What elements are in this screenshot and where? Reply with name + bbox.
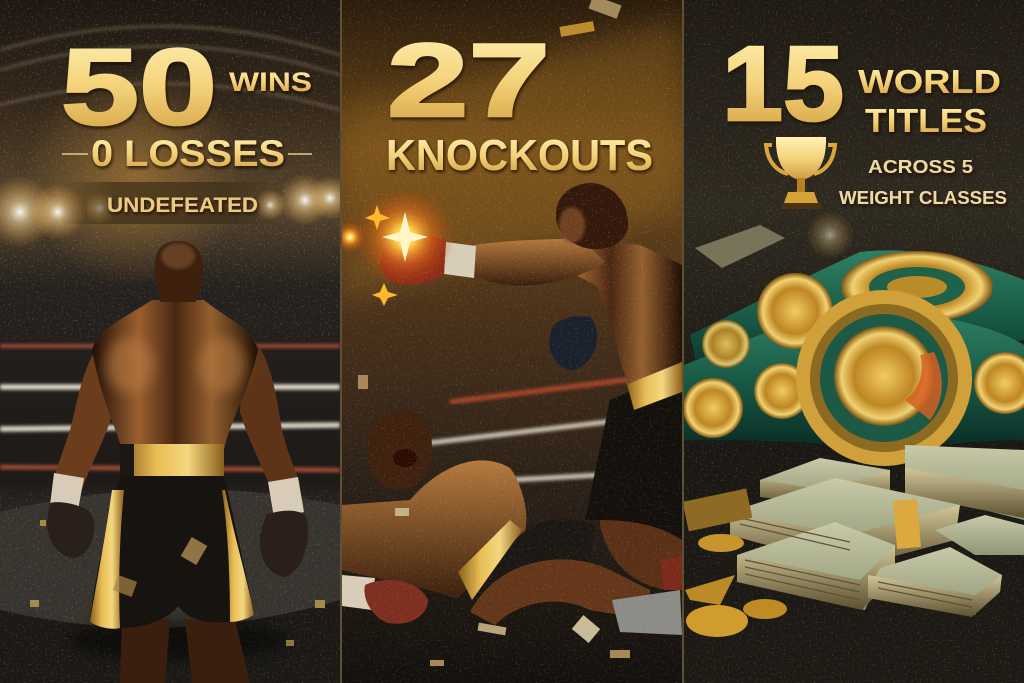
head	[155, 241, 203, 302]
shorts	[90, 475, 254, 628]
panel dividers	[340, 0, 684, 683]
label titles: TITLES	[865, 102, 987, 139]
stat: 27 knockouts	[388, 42, 654, 175]
white ring ropes	[432, 417, 606, 484]
label knockouts: KNOCKOUTS	[386, 131, 653, 180]
panel: 15 world titles belts and cash	[683, 0, 1024, 683]
legs	[120, 620, 250, 683]
arms	[56, 354, 111, 490]
championship belts	[683, 250, 1024, 466]
label weight classes: WEIGHT CLASSES	[839, 188, 1007, 208]
ring floor	[0, 490, 340, 628]
rear glove	[549, 316, 597, 370]
label across 5: ACROSS 5	[868, 157, 973, 177]
stat: 15 world titles	[727, 46, 1008, 208]
number 15: 15	[722, 25, 844, 143]
boxer from behind	[47, 241, 308, 683]
floating banknote	[695, 225, 785, 268]
panel: 50 wins undefeated boxer	[0, 0, 352, 683]
icon: gold trophy	[766, 137, 835, 209]
confetti	[30, 520, 325, 646]
label wins: WINS	[229, 67, 312, 97]
gold coins	[685, 534, 787, 637]
label world: WORLD	[858, 63, 1001, 100]
impact spark	[342, 191, 452, 306]
confetti	[358, 0, 630, 666]
torso	[92, 300, 258, 450]
panel: 27 knockouts punch	[334, 0, 682, 683]
glove and wrap	[444, 242, 476, 278]
hand wraps and gloves	[50, 473, 84, 510]
cash stacks	[683, 445, 1024, 617]
flying dust	[342, 300, 682, 683]
medallions	[757, 273, 833, 349]
label undefeated: UNDEFEATED	[107, 194, 258, 217]
red ring rope	[450, 378, 640, 402]
ring ropes	[0, 346, 340, 470]
arena lights	[0, 76, 340, 274]
number 50: 50	[61, 26, 217, 147]
label 0 losses: 0 LOSSES	[91, 133, 285, 174]
fallen boxer	[342, 410, 682, 635]
stat: 50 wins 0 losses undefeated	[62, 47, 312, 224]
punching boxer	[380, 183, 682, 590]
number 27: 27	[387, 23, 550, 139]
